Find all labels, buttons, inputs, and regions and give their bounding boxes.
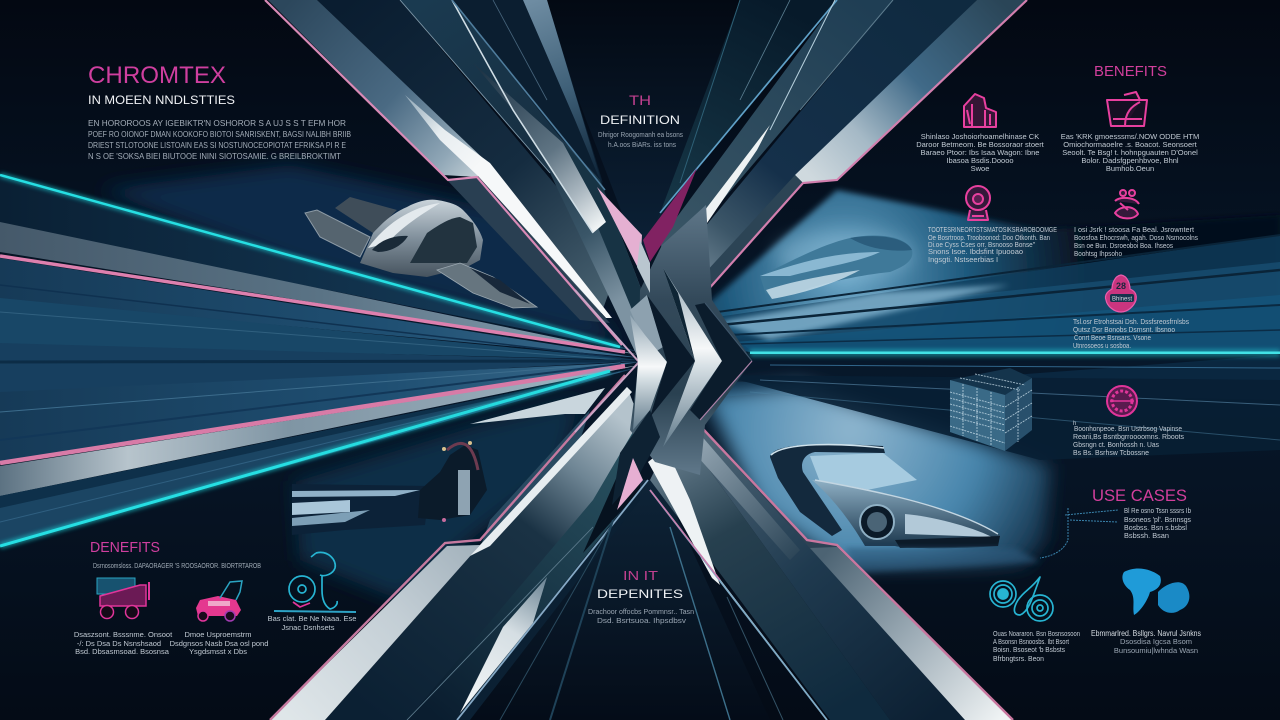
intro paragraph: EN HOROROOS AY IGEBIKTR'N OSHOROR S A UJ S S T EFM HOR [88, 118, 346, 128]
centre chevrons [575, 168, 752, 510]
image: top right car [760, 230, 915, 299]
icon: mower car [196, 581, 242, 621]
wire diagram [1040, 508, 1118, 558]
icon: robot face [966, 186, 990, 220]
benefit text 3: TOOTESRINEORTSTSMATOSIKSRAROBOOMGE [928, 225, 1057, 234]
caption device: Jsnac Dsnhsets [282, 623, 335, 632]
use-case text right: Bunsoumiu|lwhnda Wasn [1114, 646, 1198, 655]
use-case text: Bsoneos 'pl'. Bsnnsgs [1124, 515, 1191, 524]
icon: cyan device [274, 552, 356, 612]
caption mower: Dmoe Usproemstrm [184, 630, 252, 639]
title: CHROMTEX [88, 62, 226, 89]
use-case text: Bsbssh. Bsan [1124, 531, 1169, 540]
benefit text 5 [1073, 317, 1189, 350]
benefit text 4: Boosfoa Ehocrswh, agah. Doso Nsmocolns [1074, 233, 1198, 242]
heading: DEFINITION [600, 115, 680, 127]
definition text: Dhrigor Roogomanh ea bsons [598, 130, 683, 139]
heading: DENEFITS [90, 540, 160, 556]
caption mower: Ysgdsmsst x Dbs [189, 647, 247, 656]
benefits right panel [916, 63, 1199, 457]
benefit text 1: Shinlaso Joshoiorhoamelhinase CK [921, 132, 1039, 141]
intro paragraph [88, 118, 351, 161]
chrome beam: top left [265, 0, 663, 362]
text: Dsd. Bsrtsuoa. Ihpsdbsv [597, 616, 686, 625]
benefit text 5: Qutsz Dsr Bonobs Dsrnsnt. Ibsnoo [1073, 325, 1175, 334]
benefit text 3: Di.oe Cyss Cses orr. Bsnooso Bonse" [928, 240, 1035, 249]
intro paragraph: N S OE 'SOKSA BIEI BIUTOOE ININI SIOTOSAMIE. G BREILBROKTIMT [88, 151, 341, 161]
caption truck: Dsaszsont. Bsssnme. Onsoot [74, 630, 173, 639]
use-case text left: Ouas Noararon. Bsn Bosnsosoon [993, 629, 1080, 638]
icon: badge: Bhinest [1112, 296, 1132, 302]
caption truck: -/: Ds Dsa Ds Nsnshsaod [77, 639, 161, 648]
icon: badge: 28 [1116, 281, 1126, 291]
heading accent: IN IT [623, 568, 658, 583]
benefit text 5: Utnrosoeos u sosboa. [1073, 341, 1131, 350]
use-case text right [1091, 629, 1201, 655]
benefit text 6: Bs Bs. Bsrhsw Tcbossne [1073, 448, 1149, 457]
caption device [268, 614, 356, 632]
use-case text right: Ebmmarlred. Bsllgrs. Navrul Jsnkns [1091, 629, 1201, 638]
benefit text 3 [928, 225, 1057, 264]
benefit text 5: Conrt Beoe Bsnsars. Vsone [1074, 333, 1151, 342]
text [588, 607, 694, 625]
benefit text 5: Tsl.osr Etrohstsai Dsh. Dssfsreosfrnlsbs [1073, 317, 1189, 326]
definition block [598, 92, 683, 149]
icon: figure [1115, 190, 1139, 218]
heading: DEPENITES [597, 587, 683, 601]
benefit text 2: Eas 'KRK gmoesssms/.NOW ODDE HTM [1061, 132, 1199, 141]
use-case text left: Bfrbngtsrs. Beon [993, 654, 1044, 663]
benefit text 1: Swoe [971, 164, 989, 173]
chrome beam: bottom right [648, 415, 1013, 720]
benefit text 3: Snons Isoe. Ibdsfint Ipuooao [928, 247, 1023, 256]
benefit text 3: Ingsgti. Nstseerbias I [928, 255, 998, 264]
benefit text 1: Baraeo Ptoor: Ibs Isaa Wagon: Ibne [921, 148, 1039, 157]
pink edge [690, 415, 1013, 720]
text: Drachoor offocbs Pommnsr.. Tasn [588, 607, 694, 616]
caption truck: Bsd. Dbsasmsoad. Bsosnsa [75, 647, 170, 656]
benefit text 1: Ibasoa Bsdis.Doooo [946, 156, 1014, 165]
dark chevron right [690, 303, 752, 420]
pink upper stripe [0, 256, 625, 352]
benefit text 6 [1073, 421, 1184, 457]
intro paragraph: DRIEST STLOTOONE LISTOAIN EAS SI NOSTUNOCEOPIOTAT EFRIKSA PI R E [88, 140, 346, 150]
icon: vessel [1107, 92, 1147, 126]
icon: truck [97, 578, 149, 618]
heading accent: TH [629, 92, 651, 108]
pink edge [265, 0, 622, 345]
subheading: Dsrnosomsloss. DAPAORAGER 'S ROOSAOROR. BIORTRTAROB [93, 561, 261, 570]
bottom centre dark panel [470, 480, 770, 720]
in it block [588, 568, 694, 625]
cyan upper stripe [0, 175, 620, 347]
image: shoe [305, 197, 537, 308]
icon: badge [1105, 275, 1136, 312]
benefit text 4: Boohtsg Ihpsoho [1074, 249, 1122, 258]
silver chevron left [630, 315, 667, 430]
use-case text: Bosbss. Bsn s.bsbsl [1124, 523, 1187, 532]
heading: USE CASES [1092, 486, 1187, 505]
use-case text left: Boisn. Bsoseot 'b Bsbsts [993, 645, 1065, 654]
icon: world map [1122, 569, 1189, 615]
image: cube [950, 368, 1032, 451]
definition text: h.A.oos BiARs. iss tons [608, 140, 676, 149]
panel: right speed streaks [680, 190, 1280, 565]
use-case text [1124, 506, 1191, 540]
cyan lower stripe [0, 371, 610, 546]
use-case text left: A Bsonsn Bsnoosbs. Ibt Bsort [993, 637, 1070, 646]
use-case text right: Dsosdisa Igcsa Bsom [1120, 637, 1192, 646]
benefit text 1 [916, 132, 1045, 173]
caption mower [170, 630, 268, 656]
title block [88, 62, 351, 161]
panel: lower-left machine scene [292, 388, 605, 600]
upper facets [597, 187, 642, 272]
benefit text 6: h [1073, 421, 1076, 427]
icon: seal [1107, 386, 1137, 416]
benefit text 4 [1074, 225, 1198, 258]
benefit text 2: Bolor. Dadsfgpenhbvoe, Bhnl [1081, 156, 1179, 165]
benefit text 2 [1061, 132, 1199, 173]
top centre dark panel [540, 0, 780, 260]
use-case text: Bl Re osno Tssn sssrs Ib [1124, 506, 1191, 515]
benefit text 3: Oe Bosrtroop. Trooboonod: Doo Otkonth. Ban [928, 233, 1050, 242]
pink lower stripe [0, 366, 625, 463]
benefit text 1: Daroor Betmeom. Be Bossoraor stoert [916, 140, 1045, 149]
use-case text left [993, 629, 1080, 663]
use cases panel [990, 486, 1201, 663]
dark chevron [647, 295, 695, 417]
panel: left speed streaks [0, 165, 640, 546]
benefit text 2: Bumhob.Oeun [1106, 164, 1154, 173]
cyan right stripe [750, 349, 1280, 357]
caption truck [74, 630, 173, 656]
silver chevron mid [663, 268, 722, 447]
benefit text 4: Bsn oe Bun. Dsroeoboi Boa. Ihseos [1074, 241, 1173, 250]
chrome beam: bottom left [270, 375, 648, 720]
caption mower: Dsdgnsos Nasb Dsa osl pond [170, 639, 268, 648]
pink edge [690, 0, 1027, 310]
heading: BENEFITS [1094, 63, 1167, 80]
definition text [598, 130, 683, 149]
benefits left panel [74, 540, 356, 656]
chrome beam: top right [650, 0, 1027, 310]
pink edge [270, 375, 625, 720]
caption device: Bas clat. Be Ne Naaa. Ese [268, 614, 356, 623]
benefit text 2: Seoolt. Te Bsg! t. hohnpguauten D'Oonel [1062, 148, 1198, 157]
icon: cyan rings [990, 577, 1053, 621]
benefit text 2: Omiochormaoelre .s. Boacot. Seonsoert [1063, 140, 1198, 149]
machine arm [292, 441, 487, 535]
benefit text 6: Boonhonpeoe. Bsn Ustrbsog Vapinse [1074, 424, 1182, 433]
benefit text 6: Rearii,Bs Bsntbgrroooomns. Rboots [1073, 432, 1184, 441]
intro paragraph: POEF RO OIONOF DMAN KOOKOFO BIOTOI SANRISKENT, BAGSI NALIBH BRIIB [88, 129, 351, 139]
benefit text 6: Gbsngn ct. Bonhossh n. Uas [1073, 440, 1159, 449]
subtitle: IN MOEEN NNDLSTTIES [88, 93, 235, 107]
icon: bag [964, 94, 996, 127]
benefit text 4: I osi Jsrk ! stoosa Fa Beal. Jsrowntert [1074, 225, 1195, 234]
image: bottom right car [770, 444, 1040, 572]
lower facets [612, 410, 660, 505]
